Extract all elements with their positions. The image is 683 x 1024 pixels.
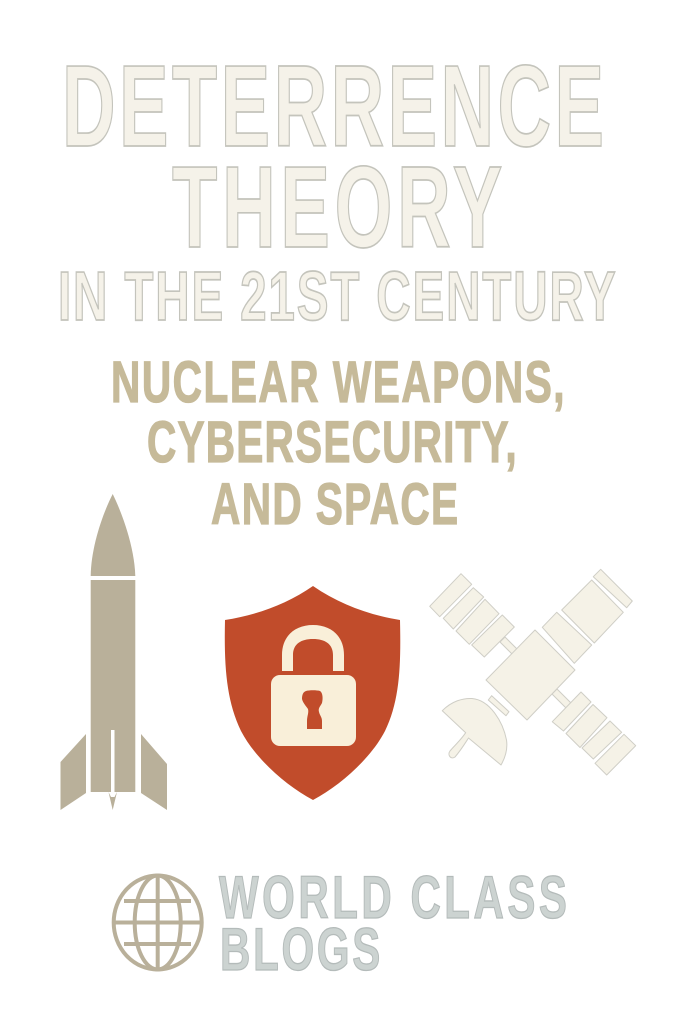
missile tail tip — [108, 792, 117, 810]
padlock shackle — [282, 625, 344, 671]
title — [58, 41, 616, 335]
padlock body — [271, 675, 356, 746]
subtitle line: And Space: AND SPACE — [211, 472, 458, 537]
title line: Deterrence: DETERRENCE — [62, 41, 604, 171]
shield — [225, 586, 400, 800]
lower right solar panel — [552, 692, 636, 775]
satellite body — [486, 630, 575, 720]
upper right solar panel — [542, 569, 632, 663]
subtitle line: Cybersecurity: CYBERSECURITY, — [147, 410, 517, 475]
subtitle line: Nuclear Weapons: NUCLEAR WEAPONS, — [111, 350, 565, 415]
satellite dish — [442, 698, 507, 765]
upper left solar panel — [430, 574, 514, 657]
missile left fin — [60, 734, 86, 810]
icon: shield with padlock — [225, 586, 400, 800]
logo: World Class Blogs — [114, 864, 567, 983]
logo text line: Blogs: BLOGS — [220, 916, 380, 983]
subtitle — [111, 350, 565, 537]
satellite connector arms — [500, 637, 571, 708]
logo text line: World Class: WORLD CLASS — [219, 864, 567, 931]
missile body — [91, 580, 135, 792]
missile nose cone — [91, 494, 135, 576]
icon: globe — [114, 876, 202, 970]
title line: Theory: THEORY — [172, 142, 502, 272]
icon: missile — [60, 494, 167, 810]
dish feed bar — [488, 696, 509, 716]
missile right fin — [141, 734, 167, 810]
icon: satellite — [430, 569, 636, 775]
title line: In the 21st Century: IN THE 21ST CENTURY — [58, 257, 616, 335]
padlock keyhole — [302, 690, 323, 729]
